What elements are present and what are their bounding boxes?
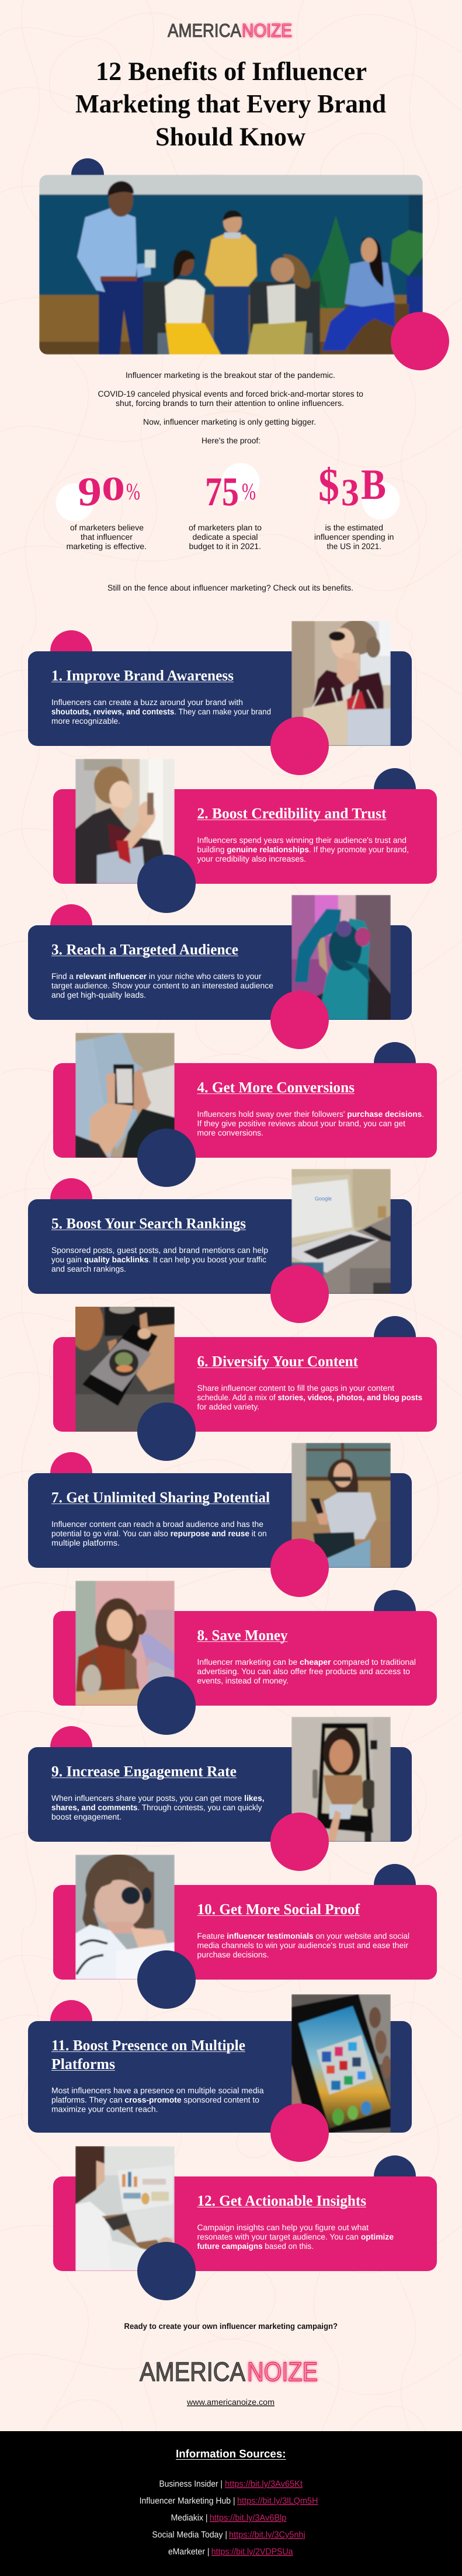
- photo: phone on tripod filming woman: [291, 1717, 391, 1842]
- body text: more recognizable.: [51, 716, 120, 725]
- panel: benefit 7: [28, 1443, 412, 1597]
- photo: laptop with search page: Google: [315, 1196, 332, 1202]
- heading: 7. Get Unlimited Sharing Potential: [51, 1489, 270, 1506]
- stat: 90%: [56, 470, 147, 551]
- body text: [197, 1383, 422, 1411]
- intro text: shut, forcing brands to turn their attention to online influencers.: [116, 398, 344, 408]
- body text: boost engagement.: [51, 1812, 121, 1821]
- source list: Influencer Marketing Hub |: [140, 2496, 235, 2506]
- body text: platforms. They can cross-promote sponsored content to: [51, 2095, 259, 2104]
- panel: benefit 3: [28, 895, 412, 1049]
- body text: target audience. Show your content to an interested audience: [51, 981, 273, 990]
- stat: 75%: %: [242, 478, 256, 505]
- body text: [51, 1793, 265, 1821]
- source list: https://bit.ly/3lLQm5H: [237, 2496, 318, 2506]
- title: Marketing that Every Brand: [75, 89, 386, 118]
- bottom logo: AMERICA: [140, 2356, 245, 2387]
- bottom logo: [140, 2356, 318, 2387]
- panel: benefit 5: [28, 1169, 412, 1323]
- panel: benefit 10: [53, 1854, 437, 2009]
- stat: 90%: 0: [102, 470, 125, 508]
- panel: benefit 4: [53, 1033, 437, 1187]
- heading: 2. Boost Credibility and Trust: [197, 805, 387, 822]
- body text: future campaigns based on this.: [197, 2241, 314, 2251]
- title: Should Know: [155, 122, 305, 151]
- body text: If they give positive reviews about your brand, you can get: [197, 1119, 405, 1128]
- panel: benefit 8: [53, 1581, 437, 1735]
- heading: [51, 2037, 245, 2072]
- body text: resonates with your target audience. You can optimize: [197, 2232, 394, 2241]
- source list: Mediakix |: [171, 2513, 208, 2523]
- stat: 90%: that influencer: [81, 532, 133, 541]
- body text: [197, 1109, 424, 1137]
- body text: [197, 835, 409, 863]
- body text: Influencers spend years winning their audience's trust and: [197, 835, 407, 845]
- photo: woman in round sunglasses: [75, 1854, 175, 1980]
- body text: you gain quality backlinks. It can help you boost your traffic: [51, 1255, 266, 1264]
- stat: $3B: the US in 2021.: [327, 541, 381, 551]
- source list: https://bit.ly/3Av65Kt: [225, 2479, 303, 2489]
- body text: [51, 971, 273, 999]
- body text: [197, 1657, 416, 1685]
- body text: advertising. You can also offer free products and access to: [197, 1667, 410, 1676]
- stat: 75%: budget to it in 2021.: [189, 541, 261, 551]
- body text: Campaign insights can help you figure out what: [197, 2223, 369, 2232]
- heading: 8. Save Money: [197, 1627, 287, 1644]
- body text: [51, 2085, 264, 2113]
- panel: benefit 11: [28, 1994, 412, 2162]
- body text: Find a relevant influencer in your niche who caters to your: [51, 971, 262, 981]
- heading: 11. Boost Presence on Multiple: [51, 2037, 245, 2054]
- top logo: NOIZE: [242, 20, 292, 41]
- heading: 10. Get More Social Proof: [197, 1901, 360, 1918]
- body text: and get high-quality leads.: [51, 990, 146, 999]
- photo: woman reading chart printouts: [75, 2146, 175, 2271]
- body text: Influencers hold sway over their followers' purchase decisions.: [197, 1109, 424, 1119]
- heading: 12. Get Actionable Insights: [197, 2192, 366, 2209]
- photo: hands shopping on phone: [75, 1033, 175, 1158]
- body text: Influencer marketing can be cheaper compared to traditional: [197, 1657, 416, 1667]
- source list: eMarketer |: [168, 2547, 209, 2557]
- heading: 3. Reach a Targeted Audience: [51, 941, 238, 958]
- heading: Platforms: [51, 2056, 115, 2072]
- body text: for added variety.: [197, 1402, 259, 1411]
- title: 12 Benefits of Influencer: [96, 57, 367, 86]
- body text: shoutouts, reviews, and contests. They can make your brand: [51, 707, 271, 716]
- bottom logo: NOIZE: [247, 2356, 318, 2387]
- panel: benefit 12: [53, 2146, 437, 2300]
- body text: more conversions.: [197, 1128, 263, 1137]
- hero: navy semicircle: [71, 158, 104, 191]
- intro text: [98, 370, 363, 445]
- body text: media channels to win your audience's trust and ease their: [197, 1940, 408, 1950]
- photo: woman using phone: [75, 759, 175, 884]
- stat: 75%: of marketers plan to: [189, 523, 262, 532]
- source list: [140, 2479, 318, 2557]
- hero: pink circle: [391, 312, 449, 370]
- intro text: COVID-19 canceled physical events and forced brick-and-mortar stores to: [98, 389, 363, 398]
- source list: https://bit.ly/3Av6Blp: [210, 2513, 286, 2523]
- stat: 90%: 9: [78, 470, 102, 515]
- website link: www.americanoize.com: [186, 2397, 275, 2407]
- source list: Business Insider |: [159, 2479, 223, 2489]
- intro text: Here's the proof:: [202, 436, 260, 445]
- transition line: Still on the fence about influencer marketing? Check out its benefits.: [107, 583, 353, 592]
- stat: 90%: %: [126, 478, 140, 505]
- stat: $3B: B: [361, 461, 386, 509]
- panel: sources footer: [0, 2431, 462, 2576]
- body text: and search rankings.: [51, 1264, 126, 1273]
- intro text: Influencer marketing is the breakout star of the pandemic.: [126, 370, 335, 380]
- body text: When influencers share your posts, you can get more likes,: [51, 1793, 265, 1803]
- source list: https://bit.ly/3Cy5nhj: [229, 2530, 305, 2540]
- call to action: Ready to create your own influencer marketing campaign?: [124, 2321, 338, 2331]
- body text: [197, 1931, 409, 1959]
- stat: $3B: 3: [341, 471, 359, 514]
- body text: [51, 697, 271, 725]
- panel: benefit 9: [28, 1717, 412, 1871]
- source list: Social Media Today |: [152, 2530, 227, 2540]
- stat: 90%: marketing is effective.: [67, 541, 147, 551]
- panel: benefit 2: [53, 759, 437, 913]
- heading: 5. Boost Your Search Rankings: [51, 1215, 246, 1232]
- photo: phone with social media apps: [291, 1994, 391, 2133]
- heading: 1. Improve Brand Awareness: [51, 667, 234, 684]
- sources heading: Information Sources:: [176, 2448, 286, 2460]
- photo: woman in neon light: [291, 895, 391, 1020]
- body text: potential to go viral. You can also repurpose and reuse it on: [51, 1529, 267, 1538]
- body text: multiple platforms.: [51, 1538, 120, 1547]
- photo: phone photographing food: [75, 1307, 175, 1432]
- body text: [51, 1245, 268, 1273]
- body text: Influencers can create a buzz around your brand with: [51, 697, 243, 707]
- body text: Feature influencer testimonials on your website and social: [197, 1931, 409, 1940]
- photo: woman with laptop on deck: [291, 1443, 391, 1568]
- stat: 75%: [189, 463, 262, 551]
- body text: Share influencer content to fill the gaps in your content: [197, 1383, 394, 1393]
- body text: [51, 1519, 267, 1547]
- stat: 75%: 75: [205, 470, 239, 515]
- body text: Sponsored posts, guest posts, and brand mentions can help: [51, 1245, 268, 1255]
- body text: building genuine relationships. If they promote your brand,: [197, 845, 409, 854]
- stat: $3B: $: [318, 460, 339, 511]
- stat: $3B: influencer spending in: [314, 532, 394, 541]
- body text: shares, and comments. Through contests, you can quickly: [51, 1803, 262, 1812]
- body text: Influencer content can reach a broad audience and has the: [51, 1519, 263, 1529]
- panel: benefit 6: [53, 1298, 437, 1461]
- title: [75, 57, 386, 151]
- stat: $3B: [314, 460, 400, 551]
- heading: 6. Diversify Your Content: [197, 1353, 358, 1370]
- intro text: Now, influencer marketing is only getting bigger.: [143, 417, 316, 426]
- heading: 9. Increase Engagement Rate: [51, 1763, 237, 1780]
- heading: 4. Get More Conversions: [197, 1079, 355, 1096]
- photo: woman with shopping bags: [291, 620, 391, 746]
- source list: https://bit.ly/2VDPSUa: [211, 2547, 293, 2557]
- body text: purchase decisions.: [197, 1950, 269, 1959]
- top logo: AMERICA: [168, 20, 242, 41]
- body text: Most influencers have a presence on multiple social media: [51, 2085, 264, 2095]
- body text: maximize your content reach.: [51, 2104, 158, 2113]
- hero photo: five people talking: [39, 175, 423, 355]
- top logo: [168, 20, 292, 41]
- photo: woman getting makeup applied: [75, 1581, 175, 1706]
- photo: laptop with search page: [291, 1169, 391, 1294]
- panel: benefit 1: [28, 620, 412, 775]
- body text: events, instead of money.: [197, 1676, 289, 1685]
- stat: 90%: of marketers believe: [70, 523, 144, 532]
- stat: $3B: is the estimated: [325, 523, 383, 532]
- body text: schedule. Add a mix of stories, videos, photos, and blog posts: [197, 1393, 422, 1402]
- stat: 75%: dedicate a special: [193, 532, 258, 541]
- body text: your credibility also increases.: [197, 854, 306, 863]
- body text: [197, 2223, 394, 2251]
